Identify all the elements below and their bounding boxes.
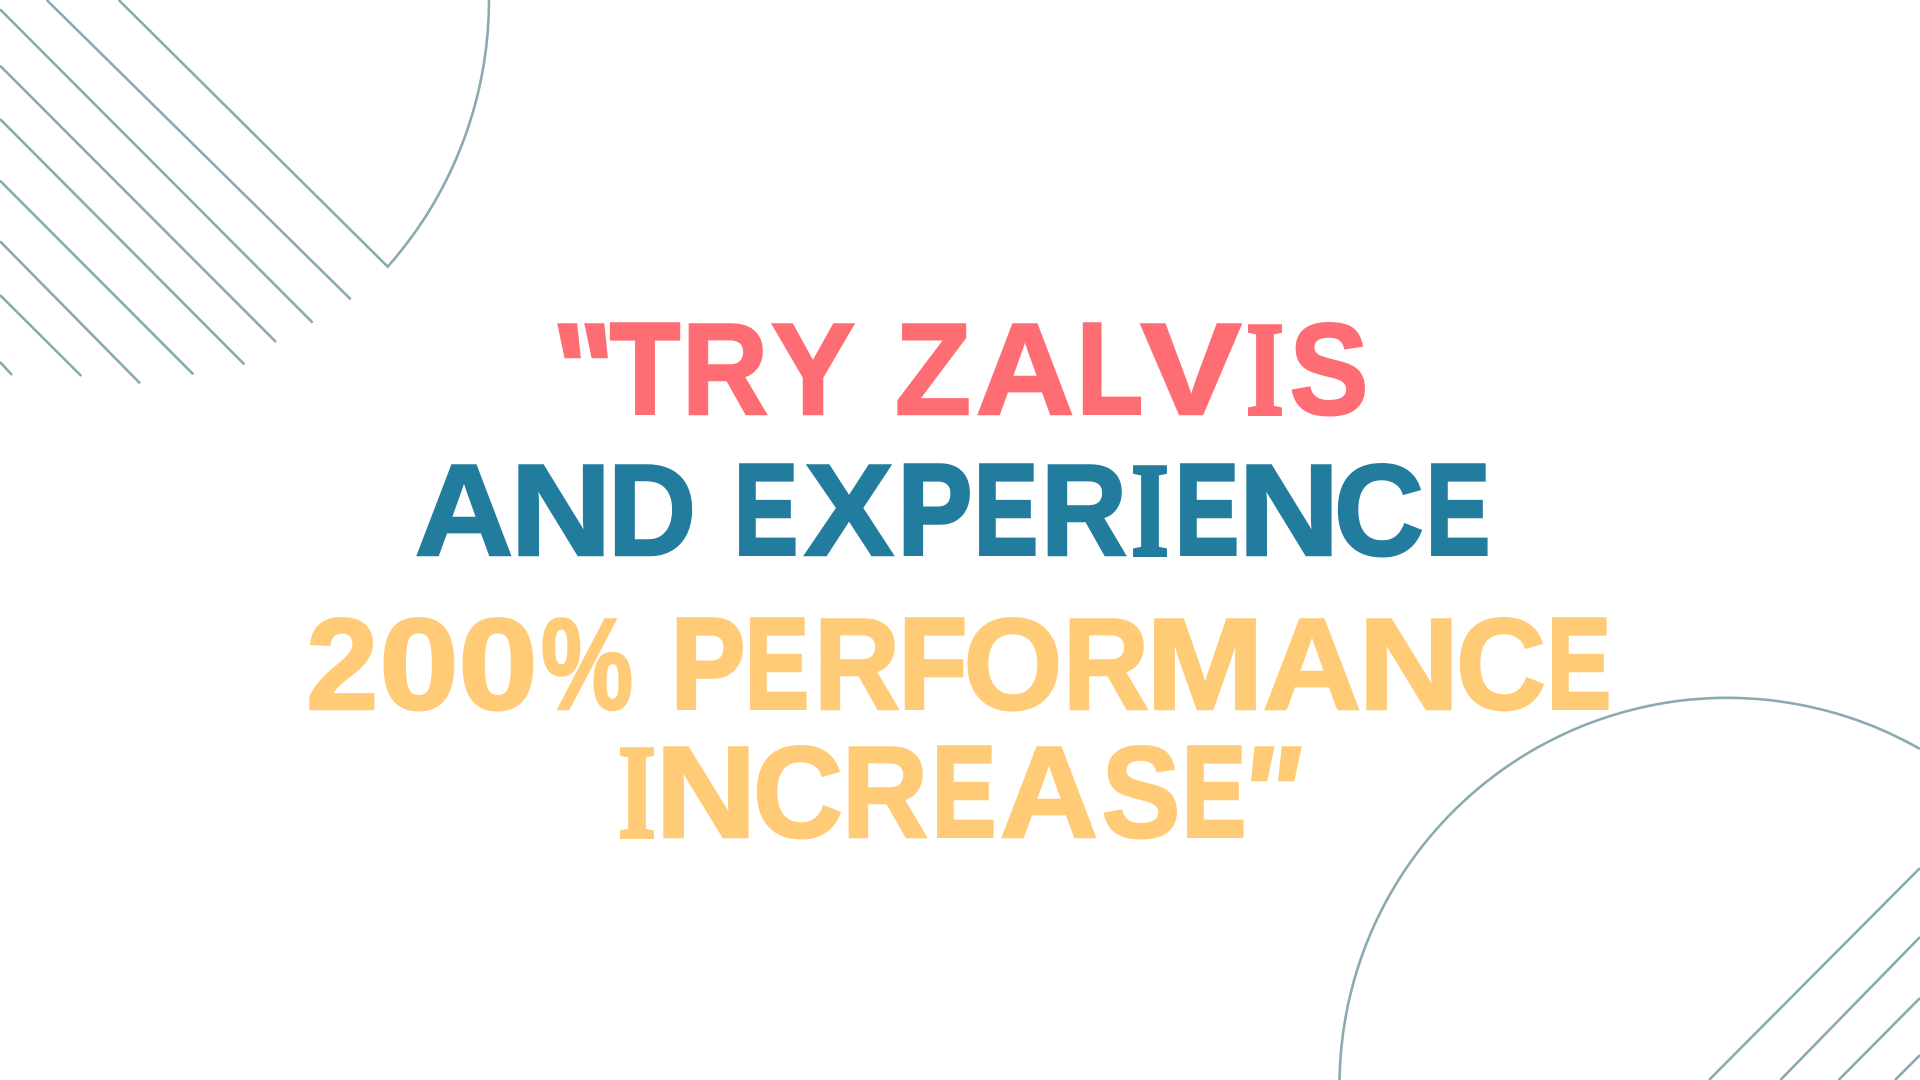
headline line 3: 200% performance: 0 (379, 591, 459, 737)
headline line 1: Try Zalvis: R (682, 296, 768, 442)
headline line 4: increase: N (655, 719, 757, 865)
headline line 4: increase (618, 718, 1313, 866)
headline line 4: increase: R (842, 719, 928, 865)
headline quote (306, 295, 1611, 866)
headline line 4: increase: A (1000, 719, 1099, 865)
headline line 1: Try Zalvis: S (1290, 296, 1368, 442)
headline line 2: and experience: C (1334, 437, 1424, 583)
headline line 1: Try Zalvis: Z (895, 296, 971, 442)
headline line 2: and experience: E (974, 438, 1038, 582)
headline line 3: 200% performance: M (1146, 591, 1264, 737)
headline line 4: increase: " (1229, 719, 1313, 865)
headline line 2: and experience: N (511, 437, 612, 583)
headline line 2: and experience: A (414, 437, 513, 583)
headline line 1: Try Zalvis: I (1246, 295, 1284, 443)
headline line 2: and experience: N (1238, 437, 1339, 583)
headline line 4: increase: S (1101, 719, 1180, 865)
headline line 2: and experience: E (1175, 438, 1239, 582)
headline line 2: and experience (414, 436, 1490, 584)
headline line 1: Try Zalvis: " (546, 296, 630, 442)
headline line 2: and experience: P (898, 438, 972, 582)
headline line 3: 200% performance: P (670, 592, 744, 736)
headline line 2: and experience: E (1427, 438, 1490, 582)
headline line 3: 200% performance: F (899, 592, 967, 736)
headline line 1: Try Zalvis: L (1077, 297, 1143, 441)
headline line 2: and experience: X (804, 437, 893, 583)
headline line 3: 200% performance: A (1262, 591, 1361, 737)
headline line 2: and experience: I (1131, 436, 1169, 584)
headline line 4: increase: I (618, 718, 655, 866)
headline line 3: 200% performance: % (541, 591, 633, 737)
headline line 4: increase: E (932, 720, 996, 864)
headline line 3: 200% performance: R (1062, 591, 1149, 737)
headline line 1: Try Zalvis: T (610, 297, 680, 441)
headline line 3: 200% performance: 0 (459, 591, 538, 737)
headline line 1: Try Zalvis: A (976, 296, 1074, 442)
headline line 1: Try Zalvis: V (1141, 296, 1241, 442)
headline line 1: Try Zalvis (546, 295, 1368, 443)
headline line 3: 200% performance: O (964, 591, 1063, 737)
headline line 2: and experience: R (1040, 437, 1127, 583)
headline line 3: 200% performance: 2 (306, 591, 378, 737)
headline line 4: increase: E (1182, 720, 1246, 864)
headline line 3: 200% performance: C (1456, 591, 1546, 737)
headline line 2: and experience: D (608, 437, 696, 583)
headline line 4: increase: C (753, 719, 843, 865)
headline line 3: 200% performance: R (813, 591, 900, 737)
headline line 2: and experience: E (734, 438, 798, 582)
headline line 3: 200% performance: N (1358, 591, 1459, 737)
headline line 3: 200% performance (306, 591, 1611, 737)
headline line 3: 200% performance: E (745, 592, 809, 736)
headline line 1: Try Zalvis: Y (771, 296, 855, 442)
headline line 3: 200% performance: E (1547, 592, 1611, 736)
